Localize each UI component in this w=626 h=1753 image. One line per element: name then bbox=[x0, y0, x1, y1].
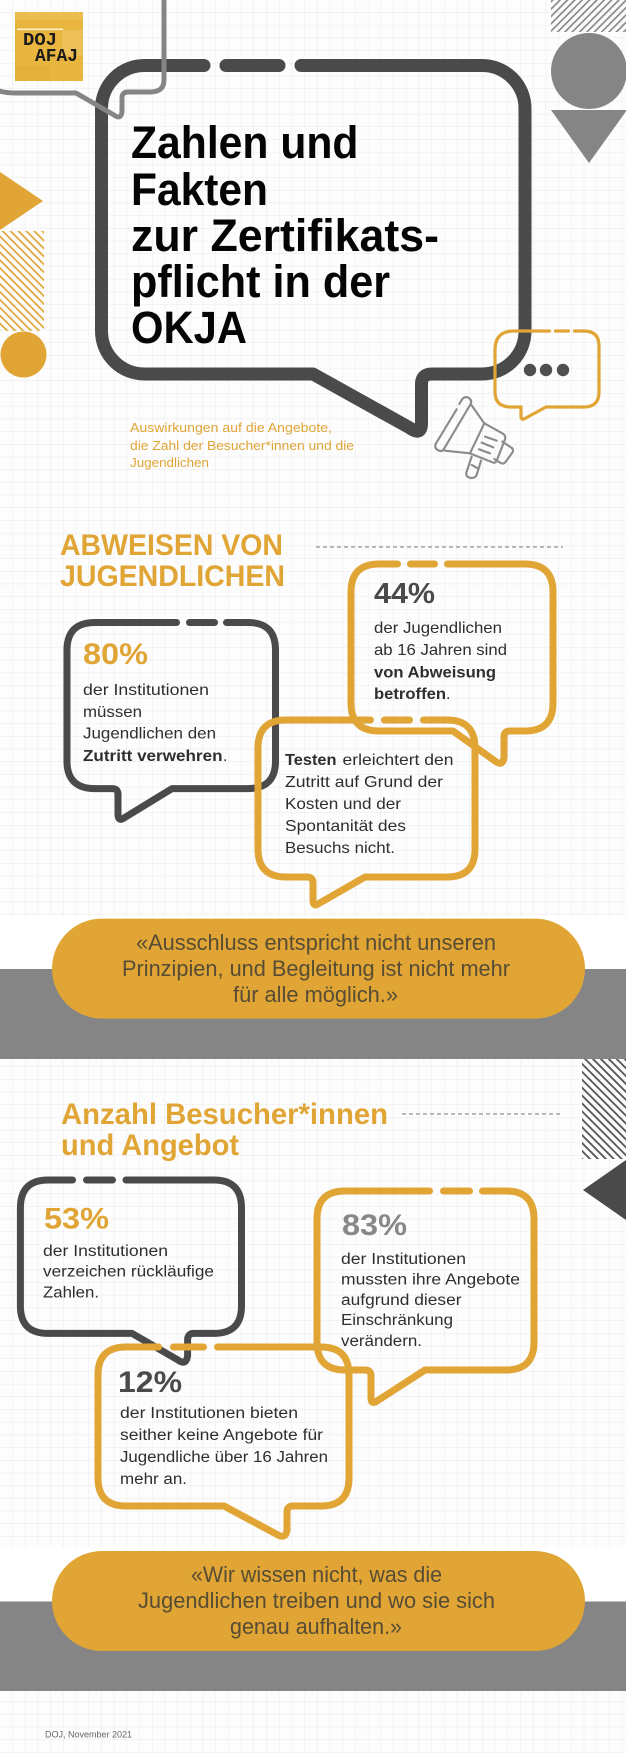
decoration: orange circle bbox=[0, 332, 46, 378]
subtitle bbox=[130, 420, 354, 470]
bubble: 83 percent: 83% bbox=[342, 1209, 407, 1242]
subtitle: Auswirkungen auf die Angebote, bbox=[130, 420, 332, 435]
small grey speech bubble bbox=[0, 0, 164, 117]
bubble: 44 percent: der Jugendlichen bbox=[374, 620, 502, 637]
bubble: 12 percent: seither keine Angebote für bbox=[120, 1427, 323, 1444]
heading: Abweisen von Jugendlichen bbox=[60, 529, 285, 593]
quote pill 2 bbox=[52, 1551, 585, 1651]
bubble: 12 percent: Jugendliche über 16 Jahren bbox=[120, 1449, 328, 1466]
subtitle: Jugendlichen bbox=[130, 455, 209, 470]
bubble: 44 percent: 44% bbox=[374, 578, 435, 610]
bubble: Testen: erleichtert den bbox=[342, 752, 454, 769]
bubble: 12 percent: der Institutionen bieten bbox=[120, 1405, 298, 1422]
decoration: top right hatch bbox=[551, 0, 626, 32]
bubble: Testen: Spontanität des bbox=[285, 818, 406, 835]
bubble: 80 percent: . bbox=[223, 748, 227, 765]
main speech bubble bbox=[101, 66, 525, 431]
quote pill 2: «Wir wissen nicht, was die bbox=[191, 1562, 442, 1587]
bubble: 80 percent bbox=[67, 622, 276, 819]
bubble: 83 percent: aufgrund dieser bbox=[341, 1292, 462, 1309]
bubble: 83 percent bbox=[317, 1191, 534, 1402]
bubble: 44 percent: betroffen bbox=[374, 686, 446, 703]
decoration: grey circle bbox=[551, 33, 626, 109]
decoration: dark triangle bbox=[583, 1160, 626, 1220]
bubble: 12 percent: mehr an. bbox=[120, 1471, 187, 1488]
bubble: 44 percent: ab 16 Jahren sind bbox=[374, 642, 507, 659]
title: Zahlen und bbox=[131, 117, 358, 168]
quote pill 2: Jugendlichen treiben und wo sie sich bbox=[138, 1588, 495, 1613]
quote pill 2: genau aufhalten.» bbox=[230, 1614, 402, 1639]
bubble: 53 percent: verzeichen rückläufige bbox=[43, 1264, 214, 1280]
bubble: 80 percent: Zutritt verwehren bbox=[83, 748, 222, 765]
bubble: 83 percent: der Institutionen bbox=[341, 1251, 466, 1268]
bubble: 80 percent: der Institutionen bbox=[83, 682, 209, 699]
icon: megaphone bbox=[435, 397, 513, 478]
quote band 2 bbox=[0, 1548, 626, 1691]
bubble: Testen: Testen bbox=[285, 752, 336, 769]
bubble: 44 percent: . bbox=[446, 686, 450, 703]
heading: Anzahl Besucher*innen und Angebot bbox=[61, 1098, 388, 1162]
quote pill 1 bbox=[52, 919, 585, 1019]
heading: Abweisen von Jugendlichen: ABWEISEN VON bbox=[60, 529, 283, 562]
bubble: Testen bbox=[258, 720, 475, 905]
bubble: 53 percent: der Institutionen bbox=[43, 1243, 168, 1260]
decoration: orange hatch bbox=[0, 231, 44, 331]
heading: Anzahl Besucher*innen und Angebot: und Angebot bbox=[61, 1129, 239, 1162]
decoration: orange triangle bbox=[0, 172, 43, 230]
bubble: 12 percent: 12% bbox=[118, 1366, 182, 1399]
title: OKJA bbox=[131, 302, 247, 353]
decoration: dark hatch bbox=[582, 1059, 626, 1159]
bubble: Testen: Kosten und der bbox=[285, 796, 402, 813]
quote pill 1: für alle möglich.» bbox=[233, 982, 398, 1007]
logo: DOJ AFAJ: AFAJ bbox=[35, 47, 78, 67]
title: pflicht in der bbox=[131, 256, 390, 307]
bubble: 83 percent: verändern. bbox=[341, 1333, 422, 1350]
bubble: 53 percent: 53% bbox=[44, 1202, 109, 1236]
title: zur Zertifikats- bbox=[131, 210, 439, 261]
bubble: 44 percent: von Abweisung bbox=[374, 664, 496, 682]
bubble: 83 percent: mussten ihre Angebote bbox=[341, 1272, 520, 1288]
decoration: grey triangle bbox=[551, 110, 626, 163]
bubble: 83 percent: Einschränkung bbox=[341, 1312, 453, 1329]
bubble: Testen: Besuchs nicht. bbox=[285, 840, 395, 857]
small yellow speech bubble with dots bbox=[495, 331, 599, 419]
quote pill 1: Prinzipien, und Begleitung ist nicht mehr bbox=[122, 956, 510, 981]
bubble: Testen: Zutritt auf Grund der bbox=[285, 774, 444, 791]
subtitle: die Zahl der Besucher*innen und die bbox=[130, 438, 354, 453]
quote band 1 bbox=[0, 916, 626, 1059]
bubble: 80 percent: Jugendlichen den bbox=[83, 726, 216, 743]
heading: Abweisen von Jugendlichen: JUGENDLICHEN bbox=[60, 560, 285, 593]
logo: DOJ AFAJ: DOJ bbox=[23, 31, 57, 51]
footer source: DOJ, November 2021 bbox=[45, 1730, 132, 1740]
heading: Anzahl Besucher*innen und Angebot: Anzahl Besucher*innen bbox=[61, 1098, 388, 1131]
bubble: 12 percent bbox=[98, 1347, 349, 1536]
bubble: 80 percent: 80% bbox=[83, 638, 148, 671]
bubble: 53 percent: Zahlen. bbox=[43, 1284, 99, 1302]
logo: DOJ AFAJ bbox=[15, 12, 83, 81]
bubble: 44 percent bbox=[351, 564, 553, 763]
bubble: 53 percent bbox=[20, 1180, 242, 1362]
title bbox=[131, 117, 439, 353]
bubble: 80 percent: müssen bbox=[83, 704, 142, 721]
quote pill 1: «Ausschluss entspricht nicht unseren bbox=[136, 930, 496, 955]
title: Fakten bbox=[131, 164, 268, 215]
